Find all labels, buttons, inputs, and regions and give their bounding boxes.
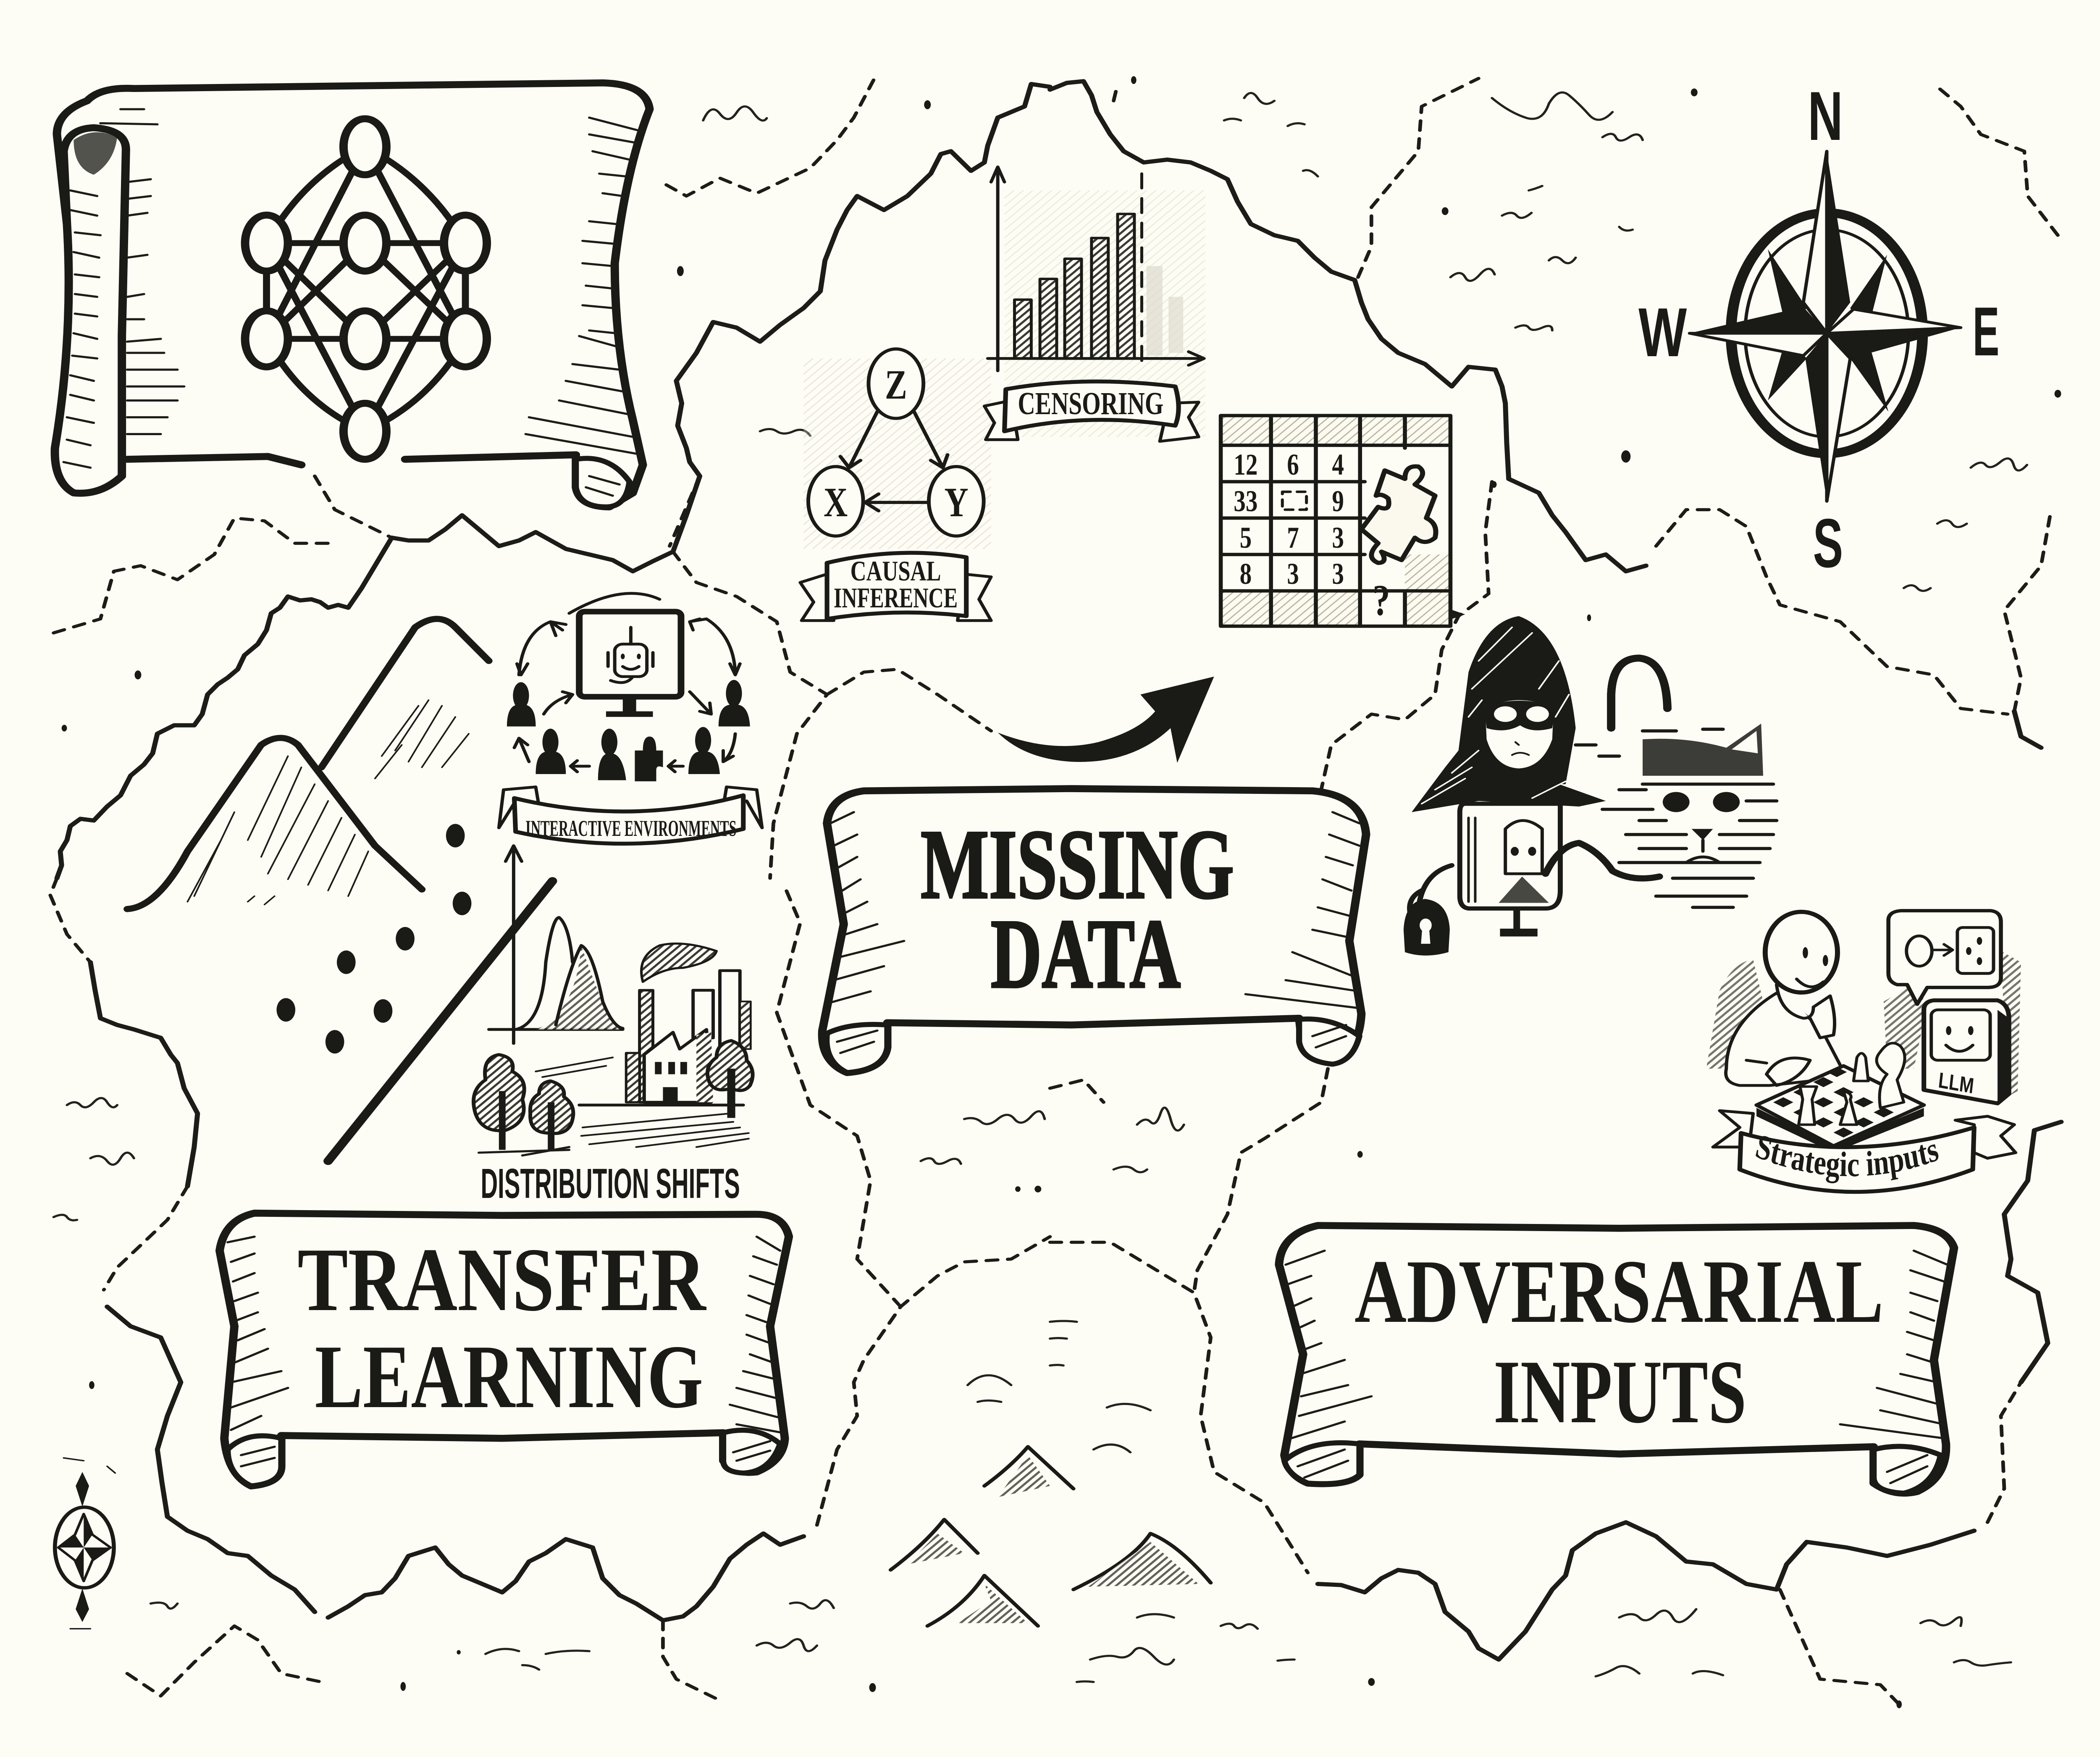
table numbers bbox=[1234, 448, 1390, 625]
causal graph letters: Z bbox=[885, 361, 907, 408]
monitor with robot bbox=[569, 594, 681, 717]
causal graph arrows bbox=[840, 412, 948, 511]
table numbers: 3 bbox=[1332, 521, 1344, 555]
title: adversarial inputs: INPUTS bbox=[1494, 1342, 1746, 1442]
label: causal inference bbox=[834, 555, 958, 614]
people in loop bbox=[507, 680, 750, 781]
bars bbox=[1014, 214, 1134, 358]
strategic inputs illustration bbox=[1706, 911, 2021, 1192]
puzzle piece bbox=[1361, 466, 1436, 563]
table numbers: 9 bbox=[1332, 485, 1344, 518]
transfer learning mountains bbox=[127, 619, 489, 909]
loop arrows bbox=[514, 619, 740, 772]
causal inference illustration bbox=[800, 349, 991, 620]
top scroll with neural network bbox=[55, 83, 650, 507]
open padlock and cat bbox=[1404, 658, 1777, 956]
label: interactive environments: INTERACTIVE ENVIRONMENTS bbox=[525, 816, 737, 841]
scroll parchment bbox=[55, 83, 650, 507]
title: missing data: DATA bbox=[991, 899, 1181, 1009]
interactive environments banner bbox=[499, 787, 762, 844]
missing data table bbox=[1221, 415, 1465, 626]
compass rings bbox=[1731, 213, 1922, 454]
title: adversarial inputs bbox=[1354, 1241, 1884, 1442]
compass letters: E bbox=[1973, 292, 1999, 370]
adversarial inputs scroll bbox=[1279, 1226, 1954, 1493]
title: transfer learning: LEARNING bbox=[315, 1326, 703, 1427]
face bbox=[1485, 700, 1554, 768]
causal graph letters: Y bbox=[944, 479, 969, 525]
central thick arrow bbox=[998, 677, 1214, 763]
closed padlock bbox=[1404, 865, 1452, 956]
table numbers: 3 bbox=[1332, 557, 1344, 591]
open shackle bbox=[1611, 658, 1667, 728]
mask bbox=[1484, 701, 1556, 730]
table numbers: 4 bbox=[1332, 448, 1344, 482]
transfer learning scroll bbox=[220, 1213, 789, 1486]
empty dashed cell bbox=[1282, 492, 1307, 510]
distribution shifts illustration bbox=[473, 846, 753, 1156]
table numbers: ? bbox=[1373, 576, 1390, 625]
label: strategic inputs: Strategic inputs bbox=[1752, 1126, 1942, 1184]
interactive environments illustration bbox=[499, 594, 762, 844]
label: causal inference: CAUSAL bbox=[850, 555, 941, 587]
chess pieces bbox=[1799, 1043, 1905, 1125]
hatched rows bbox=[1221, 415, 1450, 626]
title: adversarial inputs: ADVERSARIAL bbox=[1354, 1241, 1884, 1342]
label: censoring: CENSORING bbox=[1018, 386, 1163, 421]
small compass bbox=[55, 1458, 115, 1629]
missing data scroll bbox=[822, 788, 1366, 1073]
table numbers: 3 bbox=[1287, 557, 1299, 591]
censoring bar chart bbox=[984, 167, 1205, 441]
LLM robot bbox=[1924, 1001, 2009, 1103]
hatch shading bbox=[1706, 951, 2021, 1097]
compass letters: W bbox=[1638, 293, 1687, 371]
table numbers: 12 bbox=[1234, 448, 1257, 482]
causal graph nodes bbox=[808, 349, 984, 536]
causal graph letters: X bbox=[824, 479, 848, 525]
title: missing data: MISSING bbox=[921, 810, 1234, 919]
compass rose bbox=[1690, 151, 1961, 501]
title: transfer learning: TRANSFER bbox=[297, 1229, 707, 1330]
hood bbox=[1412, 616, 1606, 812]
trees bbox=[473, 1041, 753, 1156]
density curves bbox=[536, 945, 620, 1030]
hood hatching bbox=[1422, 627, 1569, 804]
hacker monitor bbox=[1460, 804, 1560, 937]
table numbers: 6 bbox=[1287, 448, 1299, 482]
table arrow bbox=[1450, 609, 1465, 620]
label: distribution shifts: DISTRIBUTION SHIFTS bbox=[480, 1160, 740, 1207]
compass letters: S bbox=[1813, 504, 1843, 582]
label: causal inference: INFERENCE bbox=[834, 582, 958, 614]
bottom region mountains bbox=[891, 1447, 1211, 1626]
hooded hacker bbox=[1412, 616, 1606, 812]
strategic inputs banner bbox=[1713, 1111, 2016, 1192]
player bbox=[1726, 912, 1843, 1085]
censoring banner bbox=[984, 381, 1199, 441]
label: LLM: LLM bbox=[1937, 1068, 1975, 1098]
title: transfer learning bbox=[297, 1229, 707, 1427]
separator line bbox=[328, 881, 552, 1161]
compass letters bbox=[1638, 77, 1999, 582]
speech bubble bbox=[1888, 911, 2001, 1004]
factory bbox=[536, 943, 751, 1147]
distribution axes bbox=[489, 846, 623, 1043]
faded censored bars bbox=[1147, 266, 1183, 356]
main star points bbox=[1690, 151, 1961, 501]
axes bbox=[988, 167, 1204, 371]
table numbers: 33 bbox=[1234, 485, 1257, 518]
title: missing data bbox=[921, 810, 1234, 1009]
noisy cat bbox=[1576, 724, 1777, 907]
table numbers: 5 bbox=[1240, 521, 1252, 555]
table numbers: 8 bbox=[1240, 557, 1252, 591]
causal graph background hatch bbox=[803, 358, 991, 549]
network edges bbox=[267, 147, 465, 431]
table numbers: 7 bbox=[1287, 521, 1299, 555]
compass letters: N bbox=[1808, 77, 1843, 155]
chess board bbox=[1756, 1066, 1924, 1153]
causal inference banner bbox=[800, 553, 991, 620]
table grid bbox=[1221, 415, 1450, 626]
network nodes bbox=[245, 119, 487, 459]
causal graph letters bbox=[824, 361, 969, 525]
scattered data dots bbox=[276, 824, 471, 1053]
snake cable bbox=[1546, 843, 1659, 878]
minor star points bbox=[1768, 249, 1888, 412]
